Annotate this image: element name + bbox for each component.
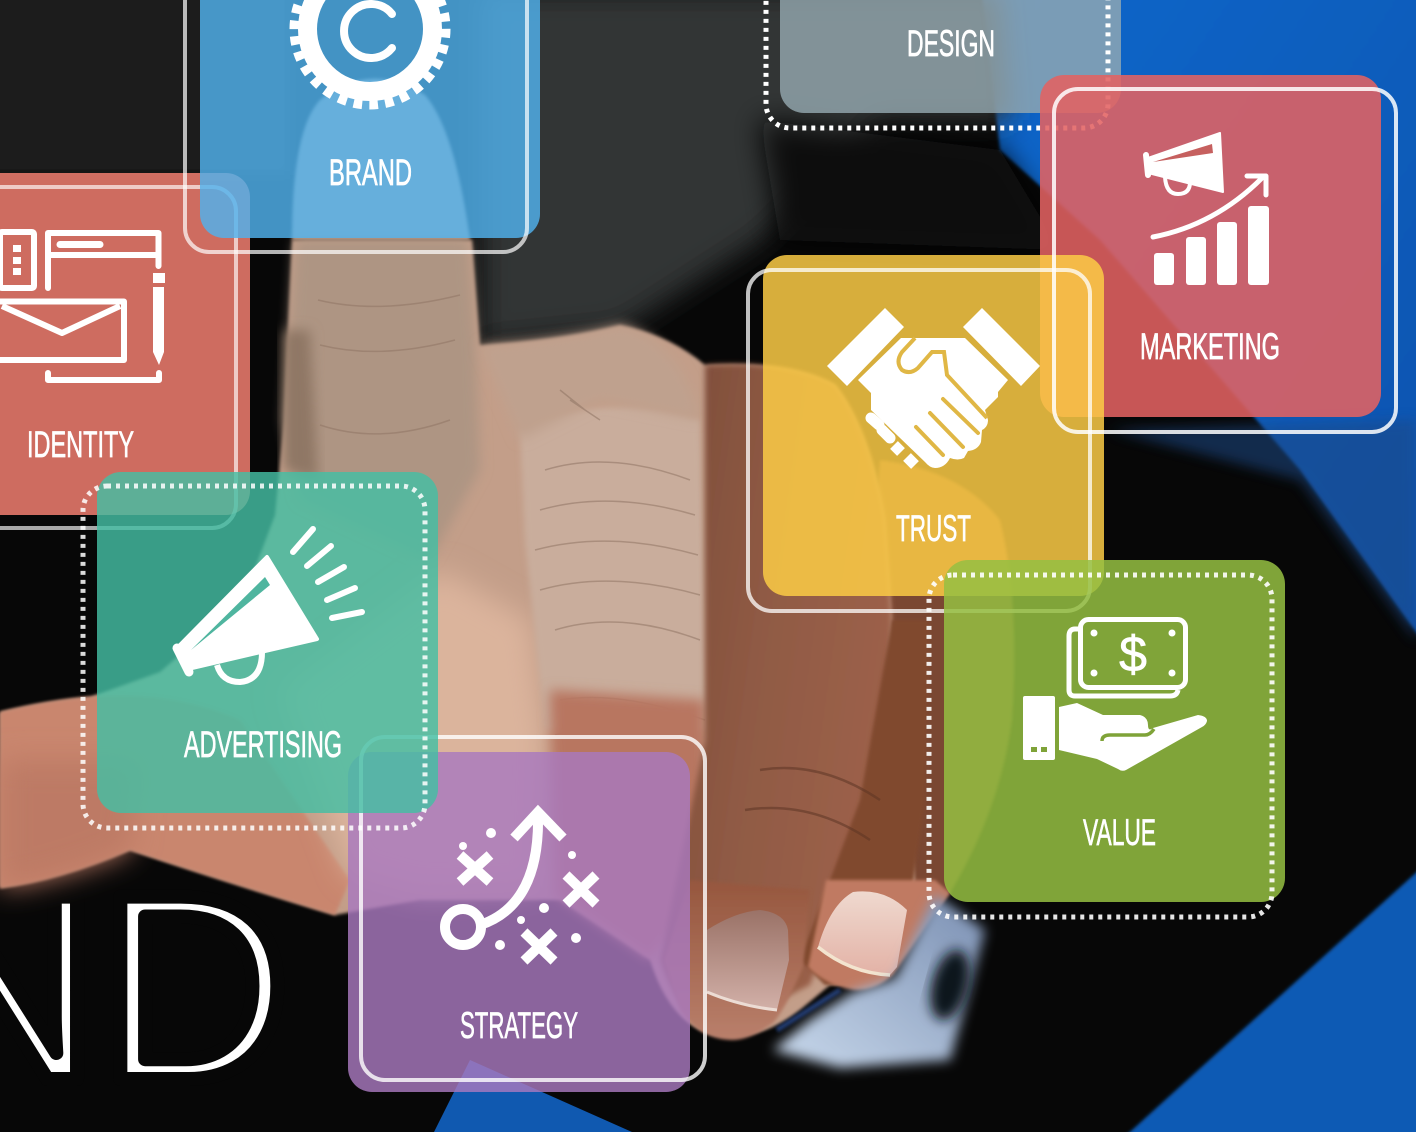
shirt cuff	[773, 895, 985, 1068]
fingernail: left	[707, 910, 789, 1010]
label: value: VALUE	[1083, 812, 1156, 853]
icon: megaphone and growth chart	[1146, 133, 1269, 285]
label: strategy: STRATEGY	[460, 1005, 578, 1046]
cuff button	[923, 946, 977, 1024]
outline: marketing frame	[1054, 89, 1396, 432]
fingernail: right	[818, 891, 907, 975]
middle fingers	[660, 364, 892, 1030]
card: brand	[185, 0, 540, 252]
card: identity	[0, 173, 250, 528]
photo: pointing hand	[0, 79, 1014, 1068]
label: advertising: ADVERTISING	[184, 724, 342, 765]
index finger tip behind brand card	[292, 79, 470, 240]
label: brand: BRAND	[329, 152, 412, 193]
icon: hand holding money: $	[1119, 626, 1147, 682]
index finger shading	[284, 240, 480, 560]
icon: hand holding money	[1023, 620, 1207, 771]
finger joint redness	[550, 690, 705, 960]
label: marketing: MARKETING	[1140, 326, 1280, 367]
icon: stationery and envelope	[0, 232, 165, 380]
cuff shadow stripe	[777, 990, 840, 1030]
card: advertising	[83, 472, 438, 828]
card: strategy	[348, 737, 705, 1092]
card: value	[929, 560, 1285, 917]
label: identity: IDENTITY	[27, 424, 134, 465]
label: design: DESIGN	[907, 23, 995, 64]
card: trust	[748, 255, 1104, 611]
hand silhouette	[0, 240, 915, 1036]
icon: megaphone	[177, 529, 362, 682]
card: marketing	[1040, 75, 1381, 417]
icon: strategy play	[445, 812, 596, 961]
thumb	[0, 696, 350, 915]
label: trust: TRUST	[896, 508, 971, 549]
icon: copyright seal	[294, 0, 446, 104]
card: design	[766, 0, 1121, 128]
right fingertip	[808, 880, 950, 990]
knuckle wrinkles	[318, 295, 705, 745]
left fingertip	[664, 880, 810, 1040]
palm and knuckles	[280, 570, 545, 895]
icon: handshake	[827, 308, 1040, 468]
third finger behind value card	[850, 460, 1014, 950]
